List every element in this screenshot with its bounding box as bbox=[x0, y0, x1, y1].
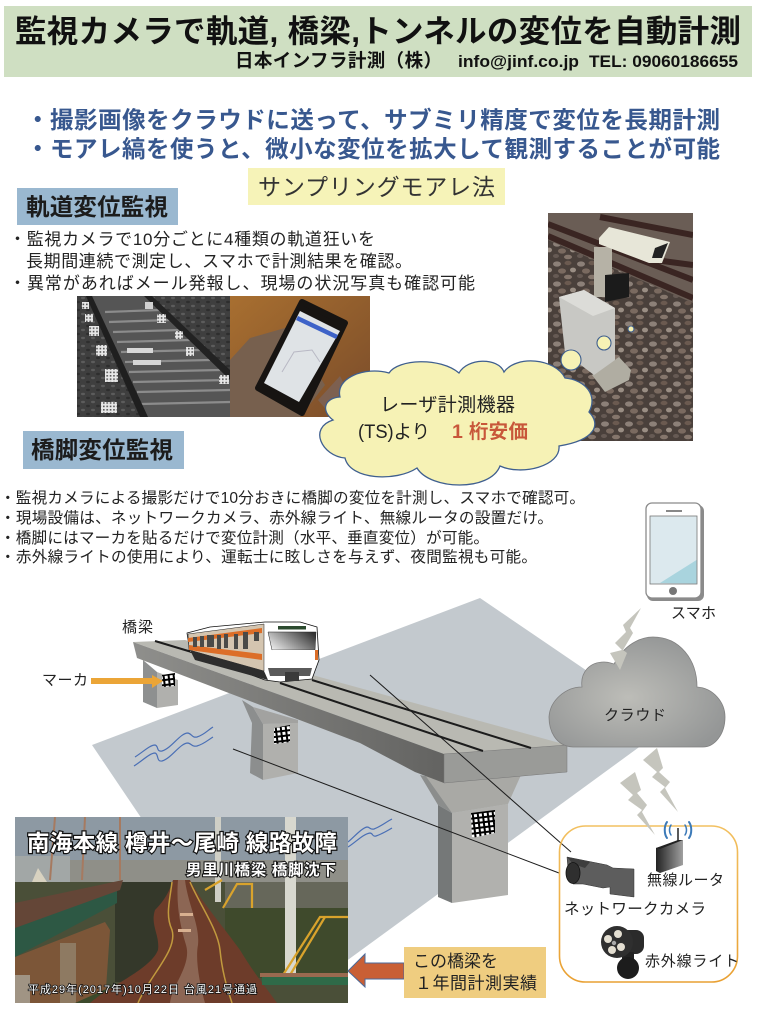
pole bbox=[285, 817, 296, 973]
heading: track monitoring bbox=[17, 188, 178, 225]
icon: infrared light bbox=[601, 926, 644, 979]
deck bbox=[133, 640, 567, 754]
middle pier with marker bbox=[242, 700, 298, 780]
text: pier monitoring bullets: ・赤外線ライトの使用により、運転士に眩しさを与えず、夜間監視も可能。 bbox=[0, 548, 537, 566]
photo caption: headline: 南海本線 樽井～尾崎 線路故障 bbox=[27, 831, 337, 856]
heading: pier monitoring: 橋脚変位監視 bbox=[31, 437, 173, 463]
arrow: marker pointer bbox=[91, 675, 163, 688]
text: track monitoring bullets: 長期間連続で測定し、スマホで計測結果を確認。 bbox=[26, 252, 412, 271]
text: track monitoring bullets: ・異常があればメール発報し、現場の状況写真も確認可能 bbox=[9, 274, 475, 293]
company and contact line: info@jinf.co.jp bbox=[458, 52, 579, 71]
label: infrared light: 赤外線ライト bbox=[645, 953, 739, 970]
near pier with marker bbox=[420, 775, 521, 903]
key points: ・撮影画像をクラウドに送って、サブミリ精度で変位を長期計測 bbox=[26, 106, 720, 133]
cloud icon bbox=[549, 637, 725, 747]
title banner bbox=[4, 6, 752, 77]
key points bbox=[26, 106, 720, 162]
line: camera to track bbox=[370, 675, 571, 852]
far pier with marker bbox=[143, 660, 178, 708]
label: network camera: ネットワークカメラ bbox=[564, 900, 706, 918]
label: smartphone: スマホ bbox=[671, 605, 716, 622]
buckled track bbox=[90, 880, 277, 1003]
equipment frame bbox=[560, 826, 738, 982]
rails bbox=[155, 641, 531, 751]
photo: Nankai line bridge pier subsidence bbox=[15, 817, 348, 1003]
callout: cheaper than laser instruments bbox=[320, 326, 634, 485]
lightning: cloud to smartphone bbox=[610, 608, 641, 670]
text: pier monitoring bullets bbox=[0, 489, 585, 566]
callout text: レーザ計測機器 bbox=[380, 394, 515, 416]
sampling moire label: サンプリングモアレ法 bbox=[258, 174, 495, 200]
company and contact line bbox=[235, 50, 738, 71]
smartphone icon bbox=[646, 503, 704, 601]
company and contact line: TEL: 09060186655 bbox=[589, 52, 738, 71]
left viaduct bbox=[15, 890, 117, 957]
cloud shape bbox=[320, 361, 595, 485]
sampling moire label bbox=[248, 168, 505, 205]
callout: one year measurement bbox=[404, 947, 546, 998]
river waves bbox=[134, 727, 392, 847]
key points: ・モアレ縞を使うと、微小な変位を拡大して観測することが可能 bbox=[26, 135, 720, 162]
label: bridge: 橋梁 bbox=[122, 619, 153, 636]
yellow railings bbox=[205, 880, 348, 975]
photo: track with moire markers bbox=[77, 296, 230, 417]
icon: wireless router bbox=[656, 822, 691, 873]
icon: network camera bbox=[566, 857, 634, 897]
callout text: 1 桁安価 bbox=[452, 421, 528, 443]
photo: field camera and control box on ballast bbox=[548, 213, 693, 441]
heading: track monitoring: 軌道変位監視 bbox=[26, 194, 168, 220]
text: pier monitoring bullets: ・現場設備は、ネットワークカメラ、赤外線ライト、無線ルータの設置だけ。 bbox=[0, 509, 553, 527]
company and contact line: 日本インフラ計測（株） bbox=[235, 50, 442, 71]
callout text: (TS)より bbox=[358, 422, 430, 443]
small thought bubbles bbox=[561, 326, 634, 370]
photo: hand holding smartphone bbox=[230, 296, 370, 417]
label: cloud: クラウド bbox=[604, 707, 666, 724]
lightning: router to cloud bbox=[620, 748, 678, 835]
label: marker: マーカ bbox=[42, 672, 88, 689]
text: pier monitoring bullets: ・監視カメラによる撮影だけで10分おきに橋脚の変位を計測し、スマホで確認可。 bbox=[0, 489, 585, 507]
heading: pier monitoring bbox=[23, 431, 184, 469]
train bbox=[187, 622, 319, 682]
text: track monitoring bullets bbox=[9, 230, 475, 293]
label: wireless router: 無線ルータ bbox=[647, 872, 724, 889]
photo caption: sub headline: 男里川橋梁 橋脚沈下 bbox=[186, 860, 336, 879]
callout: one year measurement: この橋梁を bbox=[413, 952, 498, 971]
bridge bbox=[133, 640, 567, 903]
title text: 監視カメラで軌道, 橋梁,トンネルの変位を自動計測 bbox=[15, 13, 741, 49]
photo caption: date: 平成29年(2017年)10月22日 台風21号通過 bbox=[28, 982, 257, 996]
ground plane bbox=[92, 598, 668, 962]
text: track monitoring bullets: ・監視カメラで10分ごとに4種類の軌道狂いを bbox=[9, 230, 375, 249]
line: camera to pier bbox=[233, 749, 559, 873]
text: pier monitoring bullets: ・橋脚にはマーカを貼るだけで変位計測（水平、垂直変位）が可能。 bbox=[0, 529, 489, 547]
callout text bbox=[358, 394, 528, 443]
callout: one year measurement: １年間計測実績 bbox=[415, 974, 537, 993]
arrow: to bridge photo bbox=[348, 954, 404, 987]
